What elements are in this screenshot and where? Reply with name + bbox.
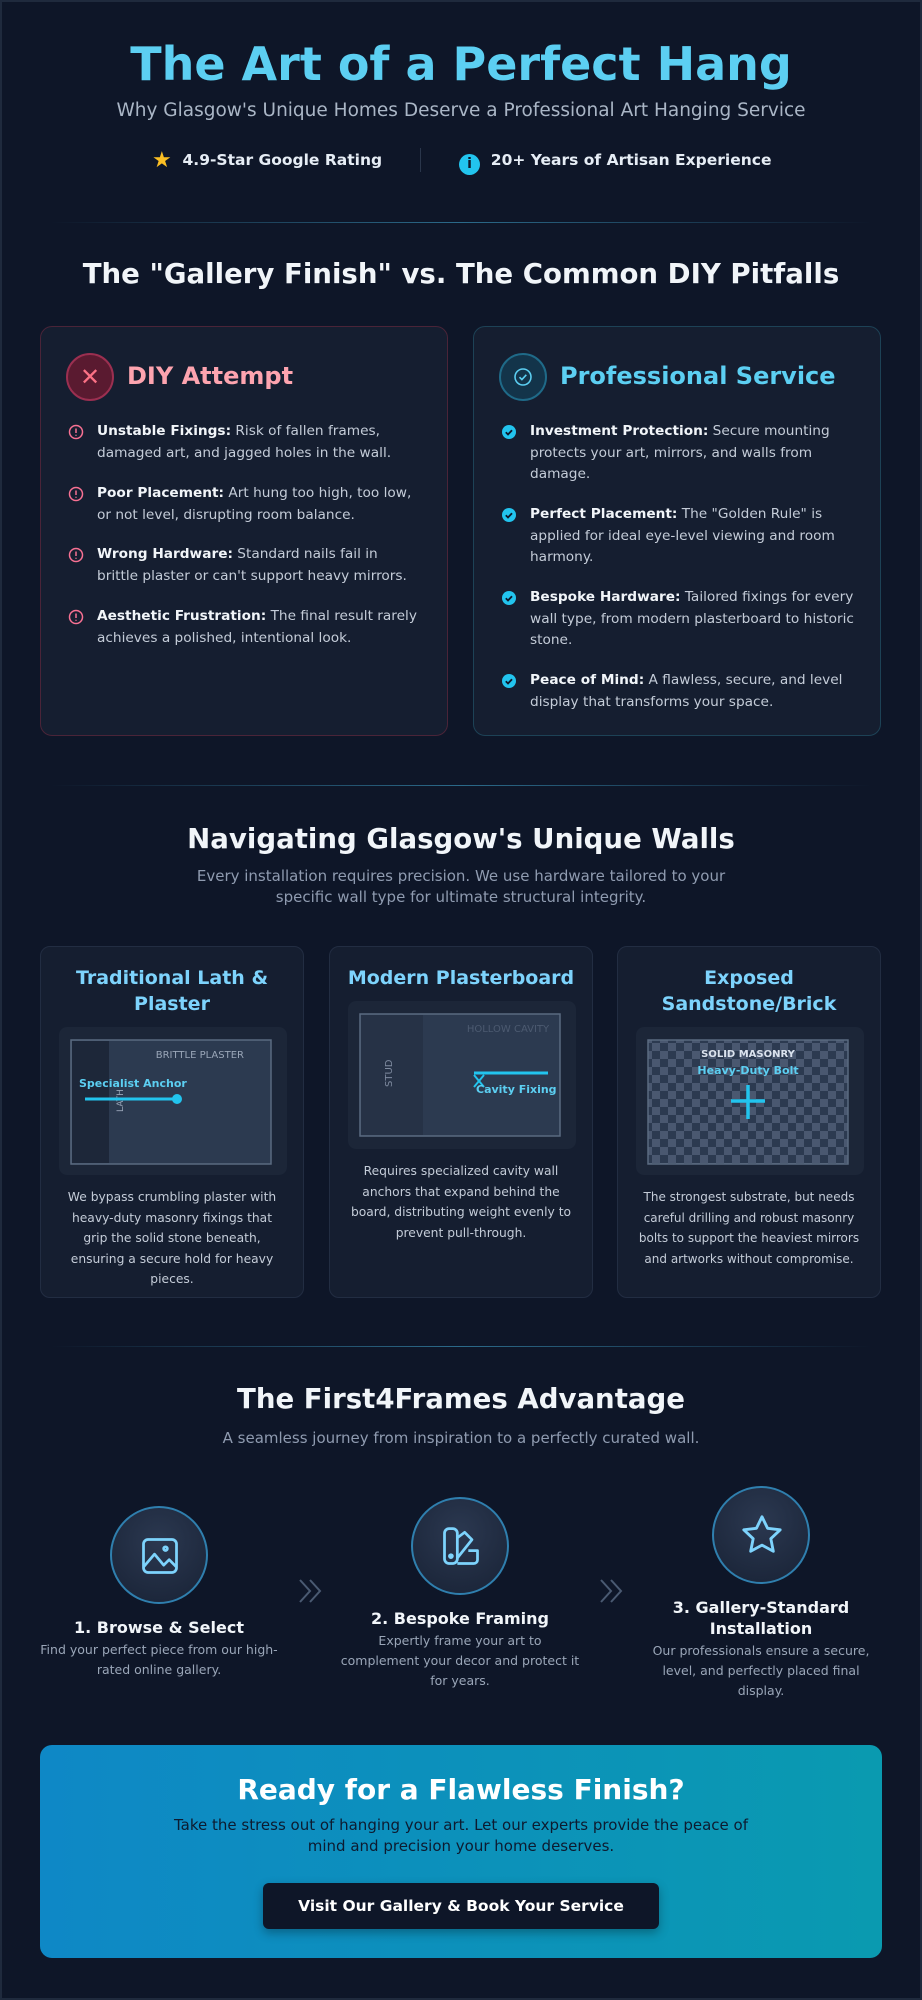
icon: swatch bbox=[411, 1497, 509, 1595]
advantage subtitle: A seamless journey from inspiration to a perfectly curated wall. bbox=[223, 1429, 699, 1447]
panel: sandstone bbox=[617, 946, 881, 1298]
panel: DIY attempt bbox=[40, 326, 448, 736]
description: We bypass crumbling plaster with heavy-duty masonry fixings that grip the solid stone beneath, ensuring a secure hold for heavy pieces. bbox=[68, 1190, 276, 1286]
CTA button bbox=[263, 1883, 659, 1929]
icon: cross: ✕ bbox=[80, 363, 100, 391]
step text: Find your perfect piece from our high-rated online gallery. bbox=[40, 1642, 278, 1677]
step text bbox=[40, 1618, 278, 1677]
step text: 3. Gallery-Standard Installation bbox=[673, 1598, 849, 1638]
diagram: plasterboard: HOLLOW CAVITY bbox=[467, 1024, 550, 1035]
diagram: lath: LATH bbox=[116, 1089, 126, 1112]
heading: advantage: The First4Frames Advantage bbox=[237, 1382, 685, 1415]
heading: Modern Plasterboard bbox=[348, 967, 574, 989]
description: The strongest substrate, but needs careful drilling and robust masonry bolts to support the heaviest mirrors and artworks without compromise. bbox=[639, 1190, 859, 1266]
badge: rating: ★ 4.9-Star Google Rating bbox=[152, 148, 382, 173]
diagram: masonry: SOLID MASONRY bbox=[701, 1049, 796, 1060]
heading: professional: Professional Service bbox=[560, 362, 836, 390]
step 3 bbox=[653, 1486, 869, 1698]
badges bbox=[152, 148, 771, 175]
step text: 1. Browse & Select bbox=[74, 1618, 244, 1637]
badge: experience: 20+ Years of Artisan Experience bbox=[491, 151, 771, 169]
CTA panel bbox=[40, 1745, 882, 1958]
item: Bespoke Hardware: Tailored fixings for every wall type, from modern plasterboard to historic stone. bbox=[530, 589, 854, 648]
icon: image bbox=[110, 1506, 208, 1604]
heading: walls: Navigating Glasgow's Unique Walls bbox=[187, 822, 735, 855]
heading: Traditional Lath & Plaster bbox=[76, 967, 268, 1015]
diagram: plasterboard bbox=[348, 1001, 576, 1149]
step text: Our professionals ensure a secure, level, and perfectly placed final display. bbox=[653, 1643, 869, 1698]
heading: Exposed Sandstone/Brick bbox=[662, 967, 836, 1015]
item: Investment Protection: Secure mounting protects your art, mirrors, and walls from damage. bbox=[530, 423, 830, 482]
diagram: lath: BRITTLE PLASTER bbox=[156, 1050, 244, 1061]
arrow bbox=[600, 1580, 622, 1602]
CTA button: Visit Our Gallery & Book Your Service bbox=[298, 1897, 624, 1915]
description: Requires specialized cavity wall anchors that expand behind the board, distributing weight evenly to prevent pull-through. bbox=[351, 1164, 571, 1240]
diagram: lath: Specialist Anchor bbox=[79, 1077, 187, 1090]
heading: comparison: The "Gallery Finish" vs. The Common DIY Pitfalls bbox=[83, 257, 839, 290]
item: Wrong Hardware: Standard nails fail in bbox=[97, 546, 378, 562]
diagram: lath bbox=[59, 1027, 287, 1175]
item: Poor Placement: Art hung too high, too low, or not level, disrupting room balance. bbox=[97, 485, 411, 522]
item: Perfect Placement: The "Golden Rule" is applied for ideal eye-level viewing and room harmony. bbox=[530, 506, 835, 565]
step 2 bbox=[341, 1497, 579, 1688]
diagram: plasterboard: Cavity Fixing bbox=[476, 1083, 557, 1096]
item: brittle plaster or can't support heavy mirrors. bbox=[97, 568, 407, 584]
step text bbox=[341, 1609, 579, 1688]
badge: experience: i bbox=[467, 156, 472, 172]
diagram: masonry: Heavy-Duty Bolt bbox=[697, 1064, 799, 1077]
item: Unstable Fixings: Risk of fallen frames, damaged art, and jagged holes in the wall. bbox=[97, 423, 391, 460]
icon: check circle bbox=[499, 353, 547, 401]
icon: star bbox=[712, 1486, 810, 1584]
CTA heading: Ready for a Flawless Finish? bbox=[237, 1773, 685, 1806]
title: The Art of a Perfect Hang bbox=[130, 37, 792, 91]
step 1 bbox=[40, 1506, 278, 1677]
walls subtitle: Every installation requires precision. We use hardware tailored to your specific wall type for ultimate structural integrity. bbox=[197, 867, 725, 906]
arrow bbox=[299, 1580, 322, 1602]
badge: experience bbox=[459, 151, 771, 175]
icon: cross bbox=[66, 353, 114, 401]
item: Peace of Mind: A flawless, secure, and level display that transforms your space. bbox=[530, 672, 842, 710]
panel: professional service bbox=[473, 326, 881, 736]
panel: plasterboard bbox=[329, 946, 593, 1298]
heading: DIY: DIY Attempt bbox=[127, 362, 293, 390]
diagram: masonry bbox=[636, 1027, 864, 1175]
step text bbox=[653, 1598, 869, 1698]
CTA text: Take the stress out of hanging your art. Let our experts provide the peace of mind and precision your home deserves. bbox=[174, 1816, 748, 1855]
step text: Expertly frame your art to complement your decor and protect it for years. bbox=[341, 1633, 579, 1688]
panel: lath & plaster bbox=[40, 946, 304, 1298]
diagram: plasterboard: STUD bbox=[384, 1059, 395, 1087]
subtitle: Why Glasgow's Unique Homes Deserve a Professional Art Hanging Service bbox=[116, 100, 806, 121]
step text: 2. Bespoke Framing bbox=[371, 1609, 549, 1628]
item: Aesthetic Frustration: The final result rarely achieves a polished, intentional look. bbox=[97, 608, 417, 646]
item bbox=[68, 546, 407, 584]
